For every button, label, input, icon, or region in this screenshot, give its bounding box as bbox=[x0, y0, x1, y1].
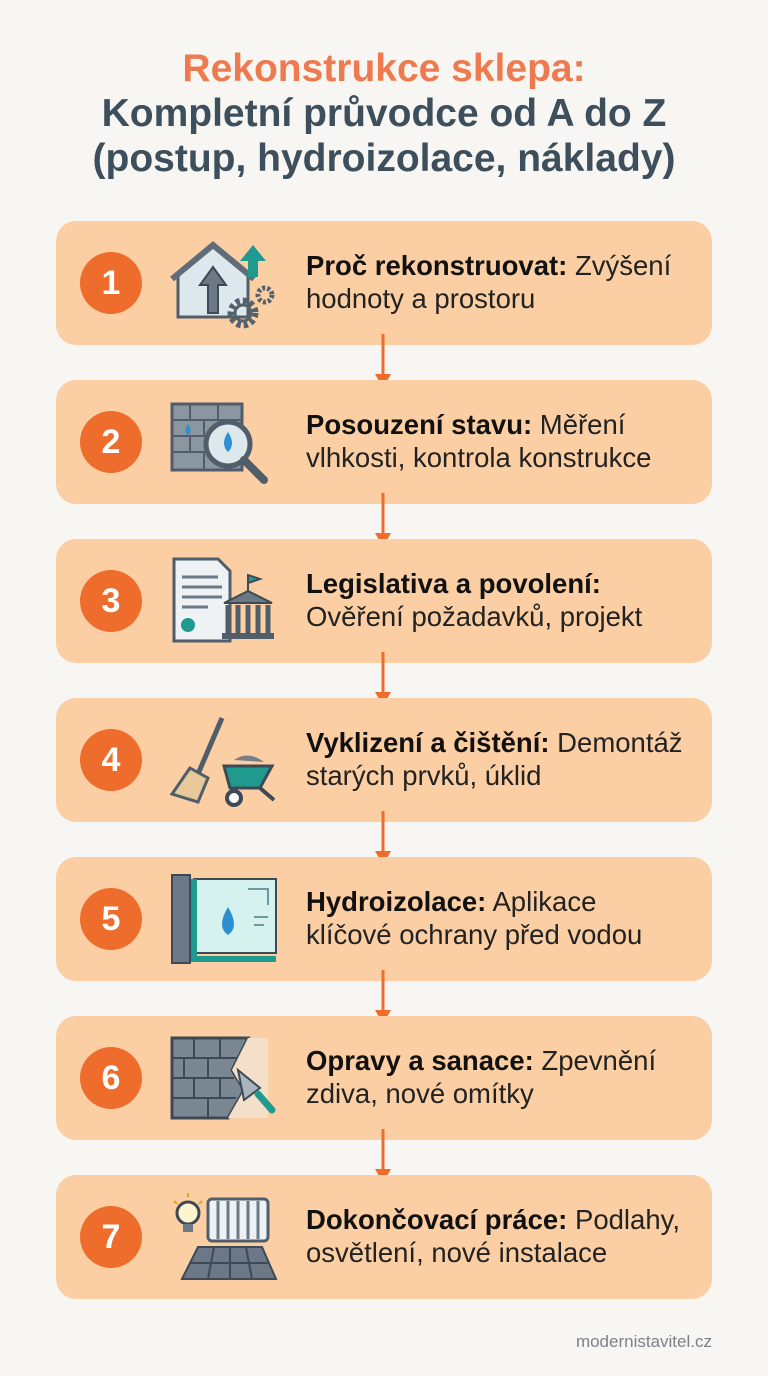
number 6 bbox=[80, 1047, 142, 1109]
icon: waterproofing wall bbox=[171, 874, 277, 964]
panel: step 1 bbox=[56, 221, 712, 345]
number 4: 4 bbox=[102, 741, 120, 779]
text: vlhkosti, kontrola konstrukce bbox=[306, 442, 651, 473]
title: Rekonstrukce sklepa: bbox=[182, 47, 586, 90]
text bbox=[306, 1204, 680, 1268]
text: Dokončovací práce: Podlahy, bbox=[306, 1204, 680, 1235]
footer: source: modernistavitel.cz bbox=[576, 1332, 712, 1351]
arrow 4-5 bbox=[375, 811, 391, 857]
panel: step 2 bbox=[56, 380, 712, 504]
text bbox=[306, 409, 651, 473]
text bbox=[306, 886, 642, 950]
panel: step 3 bbox=[56, 539, 712, 663]
title: Kompletní průvodce od A do Z bbox=[102, 92, 666, 135]
icon: house with arrow and gears bbox=[170, 241, 274, 328]
text bbox=[306, 1045, 656, 1109]
text bbox=[306, 250, 672, 314]
number 2: 2 bbox=[102, 423, 120, 461]
panel: step 4 bbox=[56, 698, 712, 822]
text: Vyklizení a čištění: Demontáž bbox=[306, 727, 683, 758]
text: osvětlení, nové instalace bbox=[306, 1237, 607, 1268]
icon: brick wall with magnifier bbox=[170, 402, 268, 484]
text: starých prvků, úklid bbox=[306, 760, 541, 791]
text bbox=[306, 727, 683, 791]
number 7: 7 bbox=[102, 1218, 120, 1256]
icon: broom and wheelbarrow bbox=[170, 717, 276, 807]
number 6: 6 bbox=[102, 1059, 120, 1097]
panel: step 7 bbox=[56, 1175, 712, 1299]
arrow 3-4 bbox=[375, 652, 391, 698]
text: Ověření požadavků, projekt bbox=[306, 601, 642, 632]
text: Legislativa a povolení: bbox=[306, 568, 601, 599]
arrow 5-6 bbox=[375, 970, 391, 1016]
icon: document and building bbox=[172, 558, 274, 642]
title: (postup, hydroizolace, náklady) bbox=[93, 137, 675, 180]
arrow 6-7 bbox=[375, 1129, 391, 1175]
icon: bulb, radiator, floor bbox=[173, 1193, 278, 1280]
text: Hydroizolace: Aplikace bbox=[306, 886, 596, 917]
icon: wall with trowel bbox=[170, 1036, 276, 1120]
arrow 1-2 bbox=[375, 334, 391, 380]
number 5: 5 bbox=[102, 900, 120, 938]
number 4 bbox=[80, 729, 142, 791]
text: klíčové ochrany před vodou bbox=[306, 919, 642, 950]
text: Proč rekonstruovat: Zvýšení bbox=[306, 250, 671, 281]
arrow 2-3 bbox=[375, 493, 391, 539]
number 2 bbox=[80, 411, 142, 473]
number 1 bbox=[80, 252, 142, 314]
text: Posouzení stavu: Měření bbox=[306, 409, 625, 440]
text: zdiva, nové omítky bbox=[306, 1078, 534, 1109]
title bbox=[93, 47, 675, 180]
number 3 bbox=[80, 570, 142, 632]
number 7 bbox=[80, 1206, 142, 1268]
panel: step 6 bbox=[56, 1016, 712, 1140]
panel: step 5 bbox=[56, 857, 712, 981]
number 3: 3 bbox=[102, 582, 120, 620]
number 1: 1 bbox=[102, 264, 120, 302]
number 5 bbox=[80, 888, 142, 950]
text: hodnoty a prostoru bbox=[306, 283, 535, 314]
text: Opravy a sanace: Zpevnění bbox=[306, 1045, 656, 1076]
text bbox=[306, 568, 642, 632]
